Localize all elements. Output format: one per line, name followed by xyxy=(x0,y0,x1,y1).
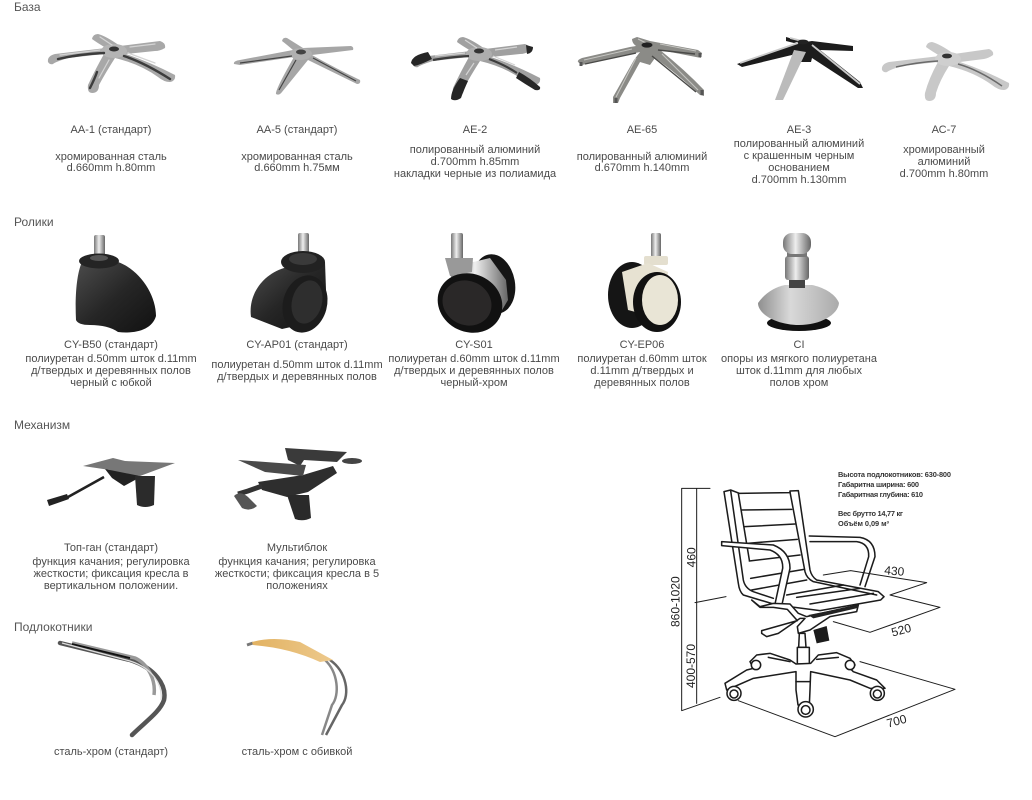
caption AE-2: d.700mm h.85mm xyxy=(431,156,519,168)
caption CY-B50: черный с юбкой xyxy=(70,377,152,389)
dimension labels xyxy=(668,547,913,730)
caption AE-3: с крашенным черным xyxy=(744,150,854,162)
caption Top-gun xyxy=(32,542,190,592)
caption AE-3: основанием xyxy=(768,162,830,174)
caption AA-5: хромированная сталь xyxy=(241,151,353,163)
chair lower: mechanism, column, base, casters xyxy=(725,600,885,717)
dimension labels: 700 xyxy=(885,712,908,730)
specifications block: Объём 0,09 м³ xyxy=(838,519,890,528)
glide CI xyxy=(758,233,839,331)
heading: Подлокотники: Подлокотники xyxy=(14,620,92,634)
dimensioned chair drawing xyxy=(668,488,955,737)
caption CY-AP01: полиуретан d.50mm шток d.11mm xyxy=(211,359,383,371)
dimension labels: 430 xyxy=(884,563,905,579)
caption AE-3: полированный алюминий xyxy=(734,138,864,150)
caption Multiblock xyxy=(215,542,379,592)
caption CI: шток d.11mm для любых xyxy=(736,365,862,377)
dimension labels: 400-570 xyxy=(684,644,698,688)
base AA-1 xyxy=(48,34,175,93)
base AC-7 xyxy=(882,42,1009,101)
caster CY-EP06 xyxy=(608,233,681,332)
caption armrest standard: сталь-хром (стандарт) xyxy=(54,746,168,758)
caption CY-AP01 xyxy=(211,339,383,383)
caption AC-7: АС-7 xyxy=(932,124,956,136)
caption Multiblock: жесткости; фиксация кресла в 5 xyxy=(215,568,379,580)
caption CY-S01: черный-хром xyxy=(440,377,508,389)
caption CY-AP01: CY-AP01 (стандарт) xyxy=(246,339,348,351)
caption CY-B50: CY-B50 (стандарт) xyxy=(64,339,158,351)
caster CY-B50 xyxy=(76,235,156,332)
base AE-65 xyxy=(578,37,704,103)
caption AA-1: АА-1 (стандарт) xyxy=(71,124,151,136)
caption AE-3: d.700mm h.130mm xyxy=(752,174,846,186)
caption CY-EP06: CY-EP06 xyxy=(620,339,664,351)
caption Multiblock: Мультиблок xyxy=(267,542,327,554)
specifications block: Габаритна ширина: 600 xyxy=(838,480,919,489)
caption AE-65 xyxy=(577,124,707,174)
base AE-3 xyxy=(737,37,863,100)
caption CY-S01: д/твердых и деревянных полов xyxy=(394,365,554,377)
caption AA-1: d.660mm h.80mm xyxy=(67,162,155,174)
dimension lines xyxy=(682,488,955,737)
caption AC-7: d.700mm h.80mm xyxy=(900,168,988,180)
specifications block: Высота подлокотников: 630-800 xyxy=(838,470,951,479)
caption AA-5: d.660mm h.75мм xyxy=(254,162,340,174)
caster CY-AP01 xyxy=(251,233,334,338)
caption CI: опоры из мягкого полиуретана xyxy=(721,353,878,365)
caption AE-65: полированный алюминий xyxy=(577,151,707,163)
caption AA-1: хромированная сталь xyxy=(55,151,167,163)
caption Top-gun: функция качания; регулировка xyxy=(32,556,190,568)
dimension labels: 860-1020 xyxy=(668,576,682,627)
caption Top-gun: жесткости; фиксация кресла в xyxy=(33,568,189,580)
caption AC-7: алюминий xyxy=(918,156,970,168)
caption CY-B50: полиуретан d.50mm шток d.11mm xyxy=(25,353,197,365)
caption AC-7 xyxy=(900,124,988,180)
caption CI xyxy=(721,339,878,389)
caption AC-7: хромированный xyxy=(903,144,985,156)
specifications block: Вес брутто 14,77 кг xyxy=(838,509,903,518)
caption CY-S01: CY-S01 xyxy=(455,339,493,351)
caption CI: CI xyxy=(794,339,804,351)
caption AE-3: АЕ-3 xyxy=(787,124,811,136)
caption AE-2: полированный алюминий xyxy=(410,144,540,156)
base AE-2 xyxy=(411,37,540,100)
specifications block xyxy=(838,470,951,528)
caption CY-EP06: деревянных полов xyxy=(594,377,690,389)
caption CY-EP06: полиуретан d.60mm шток xyxy=(577,353,707,365)
caption armrest upholstered: сталь-хром с обивкой xyxy=(242,746,352,758)
caption CY-EP06: d.11mm д/твердых и xyxy=(590,365,694,377)
armrest: chrome standard xyxy=(60,643,164,735)
caption AE-2: накладки черные из полиамида xyxy=(394,168,557,180)
mechanism: Top-gun xyxy=(47,458,175,507)
heading: Ролики: Ролики xyxy=(14,215,54,229)
caster CY-S01 xyxy=(428,233,520,343)
caption Top-gun: вертикальном положении. xyxy=(44,580,178,592)
caption AE-65: АЕ-65 xyxy=(627,124,657,136)
specifications block: Габаритная глубина: 610 xyxy=(838,490,923,499)
heading: Механизм: Механизм xyxy=(14,418,70,432)
caption CI: полов хром xyxy=(770,377,828,389)
caption CY-AP01: д/твердых и деревянных полов xyxy=(217,371,377,383)
base AA-5 xyxy=(234,38,360,95)
caption AE-2: АЕ-2 xyxy=(463,124,487,136)
chair upper: back, armrests, seat xyxy=(722,490,884,611)
caption CY-B50: д/твердых и деревянных полов xyxy=(31,365,191,377)
caption AA-5: АА-5 (стандарт) xyxy=(257,124,337,136)
dimension labels: 520 xyxy=(890,621,913,639)
heading: База: База xyxy=(14,0,41,14)
caption Top-gun: Топ-ган (стандарт) xyxy=(64,542,158,554)
mechanism: Multiblock xyxy=(234,448,362,520)
dimension labels: 460 xyxy=(685,547,699,567)
caption AE-3 xyxy=(734,124,864,186)
caption AA-5 xyxy=(241,124,353,174)
caption CY-S01: полиуретан d.60mm шток d.11mm xyxy=(388,353,560,365)
caption AE-2 xyxy=(394,124,557,180)
caption Multiblock: положениях xyxy=(266,580,328,592)
caption AE-65: d.670mm h.140mm xyxy=(595,162,689,174)
caption Multiblock: функция качания; регулировка xyxy=(218,556,376,568)
caption AA-1 xyxy=(55,124,167,174)
armrest: chrome with upholstery xyxy=(247,639,346,735)
caption CY-S01 xyxy=(388,339,560,389)
caption CY-B50 xyxy=(25,339,197,389)
caption CY-EP06 xyxy=(577,339,707,389)
